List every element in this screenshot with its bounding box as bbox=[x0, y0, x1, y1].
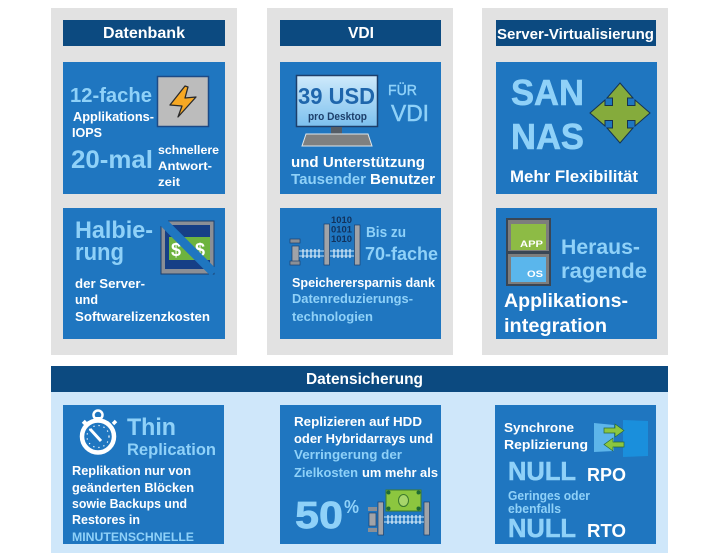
card: synchronous replication: Synchrone bbox=[504, 420, 574, 435]
card: application integration: ragende bbox=[561, 259, 647, 283]
icon: press compressing binary data: 0101 bbox=[331, 224, 353, 236]
icon: lightning bolt bbox=[158, 76, 208, 126]
card: license costs: Softwarelizenzkosten bbox=[75, 309, 210, 324]
card: Thin Replication: sowie Backups und bbox=[72, 497, 187, 511]
card: replication to HDD: % bbox=[344, 497, 359, 517]
card: Thin Replication: Thin bbox=[127, 414, 176, 441]
card: replication to HDD bbox=[280, 405, 441, 544]
card: data reduction bbox=[280, 208, 441, 339]
icon: stopwatch bbox=[82, 410, 116, 452]
card: data reduction: Bis zu bbox=[366, 225, 406, 241]
icon: press compressing binary data: 1010 bbox=[331, 234, 352, 245]
card: price per desktop: Tausender bbox=[291, 172, 366, 188]
card: IOPS and response time: 20-mal bbox=[71, 146, 153, 174]
card: license costs: der Server- bbox=[75, 276, 145, 291]
heading: Datensicherung: Datensicherung bbox=[306, 371, 423, 388]
card: replication to HDD: um mehr als bbox=[362, 465, 438, 480]
card: synchronous replication: Geringes oder bbox=[508, 488, 590, 503]
panel: VDI bbox=[267, 8, 453, 355]
heading: Server-Virtualisierung bbox=[496, 20, 656, 46]
icon: monitor: 39 USD bbox=[298, 83, 375, 109]
icon: crossed out money: $ bbox=[171, 240, 181, 260]
card: replication to HDD: Zielkosten bbox=[294, 465, 358, 480]
heading: Datenbank: Datenbank bbox=[103, 25, 185, 42]
panel: Datenbank bbox=[51, 8, 237, 355]
icon: sync arrows between panes bbox=[594, 420, 648, 457]
card: application integration: integration bbox=[504, 315, 607, 337]
card: IOPS and response time: 12-fache bbox=[70, 84, 152, 107]
card: replication to HDD: Replizieren auf HDD bbox=[294, 414, 422, 429]
card: IOPS and response time: Antwort- bbox=[158, 159, 212, 173]
heading: Server-Virtualisierung: Server-Virtualisierung bbox=[497, 26, 654, 43]
card: replication to HDD: Verringerung der bbox=[294, 447, 402, 462]
icon: monitor: pro Desktop bbox=[308, 111, 367, 123]
card: application integration: Heraus- bbox=[561, 236, 640, 259]
card: data reduction: Speicherersparnis dank bbox=[292, 275, 436, 290]
card: data reduction: technologien bbox=[292, 309, 373, 324]
card: SAN NAS flexibility: NAS bbox=[511, 116, 584, 157]
card: Thin Replication: MINUTENSCHNELLE bbox=[72, 530, 194, 544]
card: replication to HDD: 50 bbox=[295, 495, 343, 537]
panel: Datensicherung bbox=[51, 366, 668, 553]
card: price per desktop: Benutzer bbox=[370, 172, 435, 188]
card: license costs: Halbie- bbox=[75, 217, 153, 244]
card: synchronous replication: RTO bbox=[587, 521, 626, 541]
icon: four-way arrow bbox=[590, 83, 650, 143]
card: synchronous replication: NULL bbox=[508, 456, 576, 486]
card: price per desktop: und Unterstützung bbox=[291, 155, 425, 171]
card: Thin Replication: geänderten Blöcken bbox=[72, 481, 194, 495]
heading: VDI bbox=[280, 20, 441, 46]
card: application integration bbox=[496, 208, 657, 339]
card: IOPS and response time: IOPS bbox=[72, 126, 102, 140]
card: Thin Replication: Replikation nur von bbox=[72, 464, 191, 478]
card: price per desktop bbox=[280, 62, 441, 194]
card: SAN NAS flexibility: Mehr Flexibilität bbox=[510, 168, 639, 186]
icon: crossed out money bbox=[160, 219, 214, 274]
icon: press compressing binary data: 1010 bbox=[331, 215, 352, 226]
heading: Datensicherung bbox=[51, 366, 668, 392]
icon: crossed out money: $ bbox=[195, 240, 205, 260]
card: license costs: rung bbox=[75, 239, 124, 266]
card: synchronous replication: NULL bbox=[508, 513, 576, 543]
heading: Datenbank bbox=[63, 20, 225, 46]
card: synchronous replication bbox=[495, 405, 656, 544]
heading: VDI: VDI bbox=[348, 25, 374, 42]
card: license costs: und bbox=[75, 292, 98, 307]
icon: press compressing money bbox=[368, 490, 430, 535]
card: price per desktop: FÜR bbox=[388, 81, 417, 99]
card: Thin Replication: Replication bbox=[127, 441, 216, 459]
card: SAN NAS flexibility bbox=[496, 62, 657, 194]
panel: Server-Virtualisierung bbox=[482, 8, 668, 355]
card: SAN NAS flexibility: SAN bbox=[511, 72, 584, 113]
card: IOPS and response time bbox=[63, 62, 225, 194]
card: synchronous replication: ebenfalls bbox=[508, 501, 561, 516]
card: data reduction: 70-fache bbox=[365, 243, 438, 264]
card: IOPS and response time: schnellere bbox=[158, 143, 219, 157]
card: IOPS and response time: Applikations- bbox=[73, 110, 154, 124]
card: synchronous replication: RPO bbox=[587, 465, 626, 485]
card: license costs bbox=[63, 208, 225, 339]
card: Thin Replication bbox=[63, 405, 224, 544]
icon: monitor bbox=[296, 76, 378, 146]
card: synchronous replication: Replizierung bbox=[504, 437, 588, 452]
icon: APP and OS stack: OS bbox=[527, 269, 543, 279]
card: data reduction: Datenreduzierungs- bbox=[292, 291, 413, 306]
icon: APP and OS stack bbox=[506, 218, 551, 286]
icon: APP and OS stack: APP bbox=[520, 239, 543, 249]
card: Thin Replication: Restores in bbox=[72, 513, 140, 527]
card: price per desktop: VDI bbox=[391, 100, 429, 126]
card: application integration: Applikations- bbox=[504, 290, 628, 312]
card: IOPS and response time: zeit bbox=[158, 175, 180, 189]
icon: press compressing binary data bbox=[290, 215, 360, 265]
card: replication to HDD: oder Hybridarrays und bbox=[294, 431, 433, 446]
